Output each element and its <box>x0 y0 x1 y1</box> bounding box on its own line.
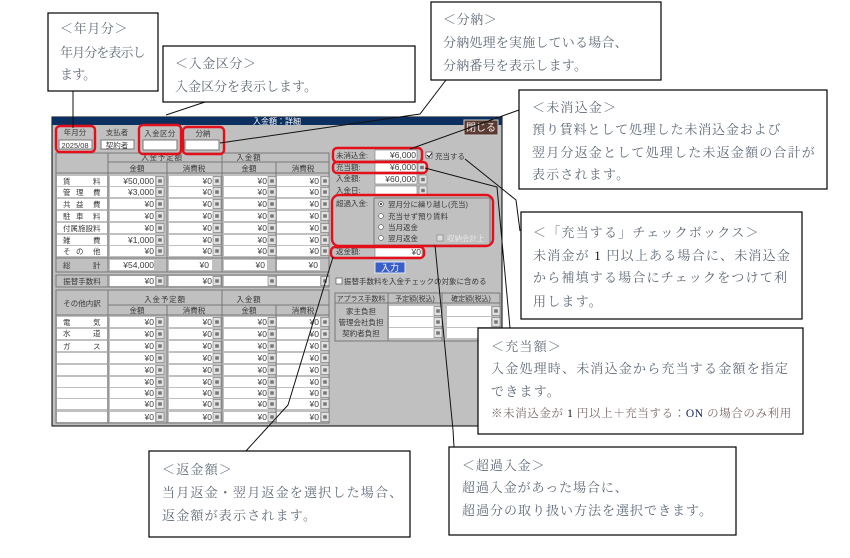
right amounts form: ¥0 <box>411 247 421 257</box>
other breakdown table: 入金額 <box>237 294 261 304</box>
breakdown inputs: ¥0 <box>257 365 267 375</box>
callout: 分納: ＜分納＞ <box>443 12 497 27</box>
apply checkbox: 充当する <box>435 151 465 161</box>
row labels: 料 <box>93 211 101 221</box>
right amounts form: 超過入金: <box>336 198 368 208</box>
row labels: 駐 <box>63 211 71 221</box>
breakdown inputs: ¥0 <box>257 377 267 387</box>
window title bar: 入金額：詳細 <box>253 116 301 126</box>
transfer fee row: ¥0 <box>202 276 212 286</box>
header fields: 分納 <box>196 128 211 138</box>
breakdown inputs: ¥0 <box>144 365 154 375</box>
breakdown inputs: ¥0 <box>257 317 267 327</box>
breakdown inputs: ¥0 <box>202 388 212 398</box>
header fields: 年月分 <box>64 127 87 137</box>
row inputs: ¥0 <box>202 211 212 221</box>
breakdown inputs: ¥0 <box>202 377 212 387</box>
breakdown labels: ガ <box>63 341 71 351</box>
row inputs: ¥3,000 <box>127 187 154 197</box>
window title bar <box>52 116 502 126</box>
callout: 分納 <box>431 2 661 80</box>
row labels: 料 <box>93 176 101 186</box>
totals row: 計 <box>93 260 101 270</box>
submit button <box>375 262 405 273</box>
breakdown inputs: ¥0 <box>202 329 212 339</box>
row labels <box>57 176 107 256</box>
header fields <box>59 127 219 150</box>
row inputs: ¥0 <box>257 211 267 221</box>
callout: 充当額 <box>478 328 803 434</box>
right amounts form: 入金額: <box>336 173 361 183</box>
totals row <box>56 258 329 272</box>
row labels: 費 <box>93 235 101 245</box>
callout: 充当する checkbox: 用します。 <box>533 294 603 309</box>
right amounts form: 返金額: <box>336 246 361 256</box>
callout: 充当する checkbox: 未消金が 1 円以上ある場合に、未消込金 <box>533 248 791 263</box>
breakdown inputs: ¥0 <box>144 317 154 327</box>
breakdown inputs: ¥0 <box>144 341 154 351</box>
breakdown inputs: ¥0 <box>257 388 267 398</box>
row inputs: ¥0 <box>202 246 212 256</box>
row inputs: ¥50,000 <box>122 176 154 186</box>
breakdown labels: 道 <box>93 328 101 338</box>
totals row: 総 <box>63 260 71 270</box>
breakdown inputs: ¥0 <box>309 317 319 327</box>
close button: 閉じる <box>466 122 496 134</box>
row inputs: ¥0 <box>144 211 154 221</box>
callout: 入金区分: 入金区分を表示します。 <box>175 79 317 94</box>
aplus fee table: 予定額(税込) <box>395 294 435 303</box>
other breakdown table: 金額 <box>242 305 257 315</box>
apply checkbox <box>426 151 465 161</box>
other breakdown table: 消費税 <box>183 305 206 315</box>
aplus fee table: 家主負担 <box>346 306 376 316</box>
row inputs: ¥0 <box>257 199 267 209</box>
callout: 分納: 分納番号を表示します。 <box>443 58 587 73</box>
callout: 充当する checkbox: から補填する場合にチェックをつけて利 <box>533 270 788 285</box>
aplus fee table: 確定額(税込) <box>451 294 491 303</box>
aplus fee table <box>335 293 500 341</box>
breakdown inputs: ¥0 <box>202 399 212 409</box>
callout: 充当する checkbox <box>521 212 802 319</box>
breakdown inputs: ¥0 <box>144 353 154 363</box>
aplus fee table: 契約者負担 <box>342 328 380 338</box>
callout: 年月分 <box>48 13 158 91</box>
row labels: 費 <box>93 187 101 197</box>
breakdown inputs: ¥0 <box>144 412 154 422</box>
breakdown inputs: ¥0 <box>309 329 319 339</box>
row inputs: ¥0 <box>309 187 319 197</box>
row inputs: ¥0 <box>309 199 319 209</box>
row inputs: ¥0 <box>257 176 267 186</box>
callout: 返金額: 返金額が表示されます。 <box>162 508 317 523</box>
breakdown inputs: ¥0 <box>309 399 319 409</box>
upper payment table <box>56 152 329 258</box>
close button <box>464 120 498 135</box>
upper payment table: 消費税 <box>292 163 315 173</box>
other breakdown table: その他内訳 <box>63 298 101 308</box>
aplus fee table: 管理会社負担 <box>338 317 384 327</box>
overpayment radio group: 翌月返金 <box>388 233 418 243</box>
other breakdown table: 消費税 <box>292 305 315 315</box>
upper payment table: 入金額 <box>237 152 261 162</box>
row inputs: ¥0 <box>309 246 319 256</box>
callout: 超過入金 <box>449 447 736 535</box>
breakdown inputs: ¥0 <box>202 341 212 351</box>
row inputs: ¥0 <box>144 246 154 256</box>
row inputs: ¥0 <box>309 176 319 186</box>
upper payment table: 金額 <box>130 163 145 173</box>
callout: 充当額: 入金処理時、未消込金から充当する金額を指定 <box>491 361 789 376</box>
right amounts form: ¥60,000 <box>384 174 416 184</box>
transfer fee row: ¥0 <box>144 276 154 286</box>
row labels: そ <box>63 247 70 256</box>
right amounts form <box>336 150 427 257</box>
breakdown inputs: ¥0 <box>144 399 154 409</box>
header fields: 支払者 <box>106 127 129 137</box>
breakdown inputs: ¥0 <box>309 412 319 422</box>
row inputs: ¥0 <box>309 223 319 233</box>
callout: 超過入金: 超過入金があった場合に、 <box>462 480 629 495</box>
row inputs: ¥0 <box>144 223 154 233</box>
row labels: 管 <box>63 187 71 197</box>
breakdown inputs: ¥0 <box>257 329 267 339</box>
row inputs: ¥0 <box>257 235 267 245</box>
upper payment table: 消費税 <box>183 163 206 173</box>
callout: 充当額: ＜充当額＞ <box>491 339 562 354</box>
submit button: 入力 <box>381 262 399 273</box>
breakdown inputs: ¥0 <box>257 412 267 422</box>
totals row: ¥54,000 <box>122 260 154 270</box>
right amounts form: 充当額: <box>336 162 361 172</box>
callout: 返金額 <box>149 451 410 537</box>
overpayment radio group: 収納会計上 <box>447 233 485 243</box>
callout: 入金区分 <box>163 46 415 102</box>
callout: 未消込金: 翌月分返金として処理した未返金額の合計が <box>532 145 816 160</box>
callout: 分納: 分納処理を実施している場合、 <box>443 35 628 50</box>
header fields: 契約者 <box>106 140 129 150</box>
callout: 年月分: 年月分を表示し <box>60 45 145 60</box>
callout: 未消込金: ＜未消込金＞ <box>532 100 617 115</box>
callout: 充当する checkbox: ＜「充当する」チェックボックス＞ <box>533 225 760 240</box>
row labels: 他 <box>93 246 101 256</box>
row labels: 付属施設料 <box>63 223 101 233</box>
totals row: ¥0 <box>199 260 209 270</box>
other breakdown table: 入金予定額 <box>144 294 186 304</box>
breakdown inputs: ¥0 <box>144 377 154 387</box>
breakdown inputs: ¥0 <box>309 377 319 387</box>
breakdown inputs: ¥0 <box>202 317 212 327</box>
right amounts form: 未消込金: <box>336 150 368 160</box>
overpayment radio group: 当月返金 <box>388 222 418 232</box>
breakdown inputs <box>110 317 329 422</box>
callout: 未消込金: 表示されます。 <box>532 167 630 182</box>
upper payment table: 金額 <box>242 163 257 173</box>
breakdown inputs: ¥0 <box>257 399 267 409</box>
totals row: ¥0 <box>308 260 318 270</box>
transfer fee checkbox: 振替手数料を入金チェックの対象に含める <box>344 276 486 286</box>
header fields: 2025/08 <box>61 141 89 150</box>
breakdown labels: 気 <box>93 317 101 327</box>
transfer fee row <box>56 275 329 287</box>
row inputs: ¥0 <box>202 223 212 233</box>
callout: 超過入金: 超過分の取り扱い方法を選択できます。 <box>462 503 713 518</box>
row inputs: ¥0 <box>144 199 154 209</box>
red highlights <box>56 125 493 258</box>
callout: 充当額: できます。 <box>491 384 561 399</box>
overpayment radio group: 充当せず預り賃料 <box>388 211 448 221</box>
application window <box>52 116 502 426</box>
breakdown inputs: ¥0 <box>257 353 267 363</box>
row labels: 益 <box>76 199 84 209</box>
row labels: 雑 <box>63 235 71 245</box>
row inputs: ¥0 <box>257 187 267 197</box>
callout: 返金額: ＜返金額＞ <box>162 462 233 477</box>
breakdown inputs: ¥0 <box>202 412 212 422</box>
overpayment radio group <box>374 198 490 245</box>
breakdown inputs: ¥0 <box>309 388 319 398</box>
right amounts form: ¥6,000 <box>389 162 416 172</box>
totals row: ¥0 <box>255 260 265 270</box>
breakdown inputs: ¥0 <box>144 388 154 398</box>
row inputs: ¥0 <box>309 211 319 221</box>
callout: 返金額: 当月返金・翌月返金を選択した場合、 <box>162 485 403 500</box>
callout: 超過入金: ＜超過入金＞ <box>462 458 545 473</box>
row labels: 賃 <box>63 177 71 186</box>
row inputs: ¥0 <box>202 187 212 197</box>
row inputs: ¥0 <box>309 235 319 245</box>
row inputs: ¥0 <box>202 199 212 209</box>
header fields: 入金区分 <box>144 128 176 138</box>
breakdown inputs: ¥0 <box>309 365 319 375</box>
row labels: 共 <box>63 200 71 209</box>
breakdown inputs: ¥0 <box>144 329 154 339</box>
row labels: 車 <box>76 211 84 221</box>
transfer fee row: 振替手数料 <box>63 276 101 286</box>
row inputs <box>110 176 329 256</box>
row inputs: ¥1,000 <box>127 235 154 245</box>
breakdown labels: 電 <box>63 318 71 327</box>
breakdown labels <box>57 317 107 422</box>
breakdown inputs: ¥0 <box>202 353 212 363</box>
breakdown inputs: ¥0 <box>257 341 267 351</box>
upper payment table: 入金予定額 <box>141 152 183 162</box>
breakdown labels: ス <box>93 342 100 351</box>
row inputs: ¥0 <box>257 223 267 233</box>
leader lines <box>73 80 520 452</box>
breakdown labels: 水 <box>63 328 71 338</box>
callout: 充当額: ※未消込金が 1 円以上＋充当する：ON の場合のみ利用 <box>491 406 792 420</box>
breakdown inputs: ¥0 <box>309 341 319 351</box>
aplus fee table: アプラス手数料 <box>337 294 385 303</box>
other breakdown table: 金額 <box>130 305 145 315</box>
breakdown inputs: ¥0 <box>202 365 212 375</box>
callout: 未消込金: 預り賃料として処理した未消込金および <box>532 122 781 137</box>
row labels: 費 <box>93 199 101 209</box>
callout: 入金区分: ＜入金区分＞ <box>175 56 257 71</box>
row labels: の <box>76 247 84 256</box>
callout: 年月分: ます。 <box>60 67 95 82</box>
callout: 未消込金 <box>519 90 827 189</box>
right amounts form: 入金日: <box>336 185 361 195</box>
row inputs: ¥0 <box>257 246 267 256</box>
right amounts form: ¥6,000 <box>389 150 416 160</box>
row inputs: ¥0 <box>202 235 212 245</box>
row labels: 理 <box>76 188 84 197</box>
breakdown inputs: ¥0 <box>309 353 319 363</box>
overpayment radio group: 翌月分に繰り越し(充当) <box>388 199 468 209</box>
callout: 年月分: ＜年月分＞ <box>60 21 128 36</box>
other breakdown table <box>56 290 329 423</box>
row inputs: ¥0 <box>202 176 212 186</box>
